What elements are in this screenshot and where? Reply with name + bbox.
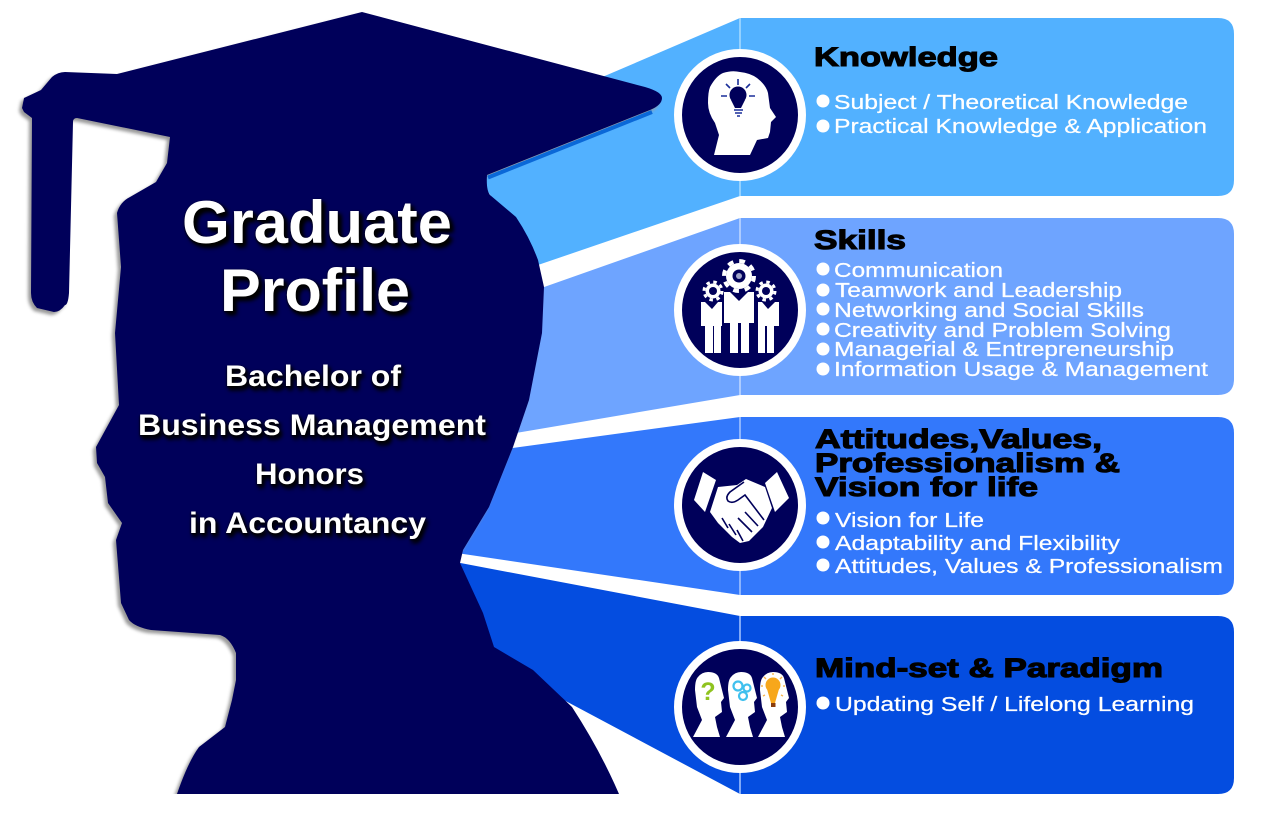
bullet list: skills: Managerial & Entrepreneurship	[834, 339, 1174, 361]
question mark: ?	[700, 678, 716, 706]
heading: attitudes and values: Professionalism &	[815, 448, 1120, 478]
heading: knowledge: Knowledge	[814, 42, 998, 72]
bullet list: knowledge: Practical Knowledge & Application	[834, 116, 1207, 138]
bullet list: skills	[816, 260, 1209, 381]
icon: team with gears	[678, 248, 802, 372]
title: graduate profile: Profile	[220, 257, 410, 324]
bullet list: attitudes and values: Vision for Life	[835, 510, 984, 532]
bullet list: attitudes and values	[816, 510, 1223, 578]
subtitle: degree name: Business Management	[138, 409, 486, 442]
blue gears	[734, 682, 750, 700]
graduate head silhouette	[22, 12, 662, 794]
subtitle: degree name: in Accountancy	[189, 507, 426, 540]
bullet list: skills: Creativity and Problem Solving	[834, 320, 1171, 342]
bullet list: knowledge: Subject / Theoretical Knowledge	[834, 92, 1188, 114]
white base below silhouette	[150, 794, 650, 802]
bullet list: skills: Networking and Social Skills	[834, 300, 1144, 322]
panel: knowledge	[480, 18, 1234, 265]
icon: handshake	[678, 443, 802, 567]
icon: head with light bulb	[678, 53, 802, 177]
heading: attitudes and values	[815, 424, 1120, 502]
subtitle: degree name: Honors	[255, 458, 364, 491]
bullet list: attitudes and values: Adaptability and Flexibility	[835, 533, 1120, 555]
bullet list: skills: Communication	[834, 260, 1003, 282]
subtitle: degree name	[138, 360, 486, 540]
subtitle: degree name: Bachelor of	[225, 360, 402, 393]
heading: attitudes and values: Vision for life	[815, 472, 1038, 502]
heading: mind-set and paradigm: Mind-set & Paradigm	[815, 653, 1163, 683]
orange bulb	[761, 673, 785, 707]
panel: mind-set and paradigm	[450, 561, 1234, 794]
icon: three heads	[678, 645, 802, 769]
title: graduate profile	[182, 189, 452, 324]
panel: attitudes and values	[450, 417, 1234, 595]
bullet list: skills: Teamwork and Leadership	[835, 280, 1122, 302]
bullet list: mind-set and paradigm: Updating Self / Lifelong Learning	[835, 694, 1194, 716]
panel: skills	[510, 218, 1234, 434]
bullet list: attitudes and values: Attitudes, Values & Professionalism	[835, 556, 1223, 578]
bullet list: skills: Information Usage & Management	[834, 359, 1209, 381]
heading: skills: Skills	[814, 225, 906, 255]
bullet list: knowledge	[816, 92, 1207, 138]
title: graduate profile: Graduate	[182, 189, 452, 256]
heading: attitudes and values: Attitudes,Values,	[815, 424, 1102, 454]
